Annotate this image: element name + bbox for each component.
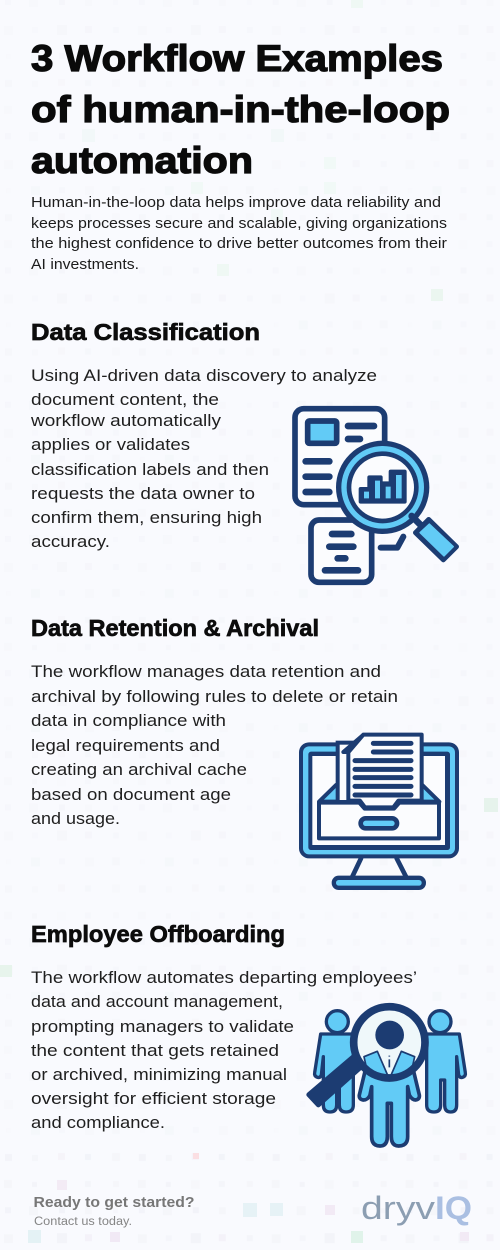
title: of human-in-the-loop [31, 89, 450, 130]
body text: data retention and archival [31, 662, 398, 828]
body text: data retention and archival: The workflow manages data retention and [31, 662, 381, 681]
body text: data retention and archival: data in compliance with [31, 711, 226, 730]
body text: data retention and archival: creating an archival cache [31, 760, 247, 779]
logo: dryvIQ [361, 1190, 472, 1226]
panel: data retention and archival [31, 615, 459, 890]
footer call to action: Contact us today. [34, 1216, 132, 1228]
body text: data retention and archival: legal requirements and [31, 736, 220, 755]
body text: employee offboarding: prompting managers to validate [31, 1017, 294, 1036]
body text: data classification [30, 366, 377, 551]
body text: employee offboarding: and compliance. [31, 1113, 165, 1132]
footer call to action: Ready to get started? [34, 1194, 195, 1211]
panel: employee offboarding [31, 921, 465, 1146]
icon: computer monitor with file tray [299, 735, 459, 890]
title [31, 38, 450, 181]
body text: data classification: Using AI-driven data discovery to analyze [31, 366, 377, 385]
logo: dryvIQ: IQ [435, 1190, 472, 1226]
footer call to action [34, 1194, 195, 1228]
body text: data classification: applies or validates [31, 435, 190, 454]
body text: employee offboarding: The workflow automates departing employees’ [31, 968, 417, 987]
body text: employee offboarding [31, 968, 417, 1132]
panel: data classification [30, 319, 457, 582]
heading: data classification: Data Classification [31, 319, 260, 345]
body text: data retention and archival: archival by following rules to delete or retain [31, 687, 398, 706]
body text: employee offboarding: or archived, minimizing manual [31, 1065, 287, 1084]
icon: documents under magnifying glass with bar chart [295, 409, 457, 582]
body text: data classification: requests the data owner to [31, 484, 255, 503]
intro text [31, 194, 447, 273]
body text: employee offboarding: the content that gets retained [31, 1041, 279, 1060]
intro text: the highest confidence to drive better outcomes from their [31, 235, 447, 252]
body text: data retention and archival: and usage. [31, 809, 120, 828]
heading: employee offboarding: Employee Offboarding [31, 921, 285, 947]
intro text: AI investments. [31, 256, 139, 273]
body text: employee offboarding: oversight for efficient storage [31, 1089, 276, 1108]
title: automation [31, 140, 253, 181]
body text: data classification: workflow automatically [30, 411, 222, 430]
heading: data retention and archival: Data Retention & Archival [31, 615, 319, 641]
body text: data retention and archival: based on document age [31, 785, 231, 804]
body text: data classification: confirm them, ensuring high [31, 508, 262, 527]
icon: magnifying glass over employees [309, 1007, 465, 1146]
intro text: Human-in-the-loop data helps improve data reliability and [31, 194, 441, 211]
body text: data classification: document content, the [31, 390, 219, 409]
body text: data classification: classification labels and then [31, 460, 269, 479]
body text: employee offboarding: data and account management, [31, 992, 283, 1011]
logo: dryvIQ: dryv [361, 1190, 435, 1226]
intro text: keeps processes secure and scalable, giving organizations [31, 215, 447, 232]
title: 3 Workflow Examples [31, 38, 443, 79]
body text: data classification: accuracy. [31, 532, 110, 551]
